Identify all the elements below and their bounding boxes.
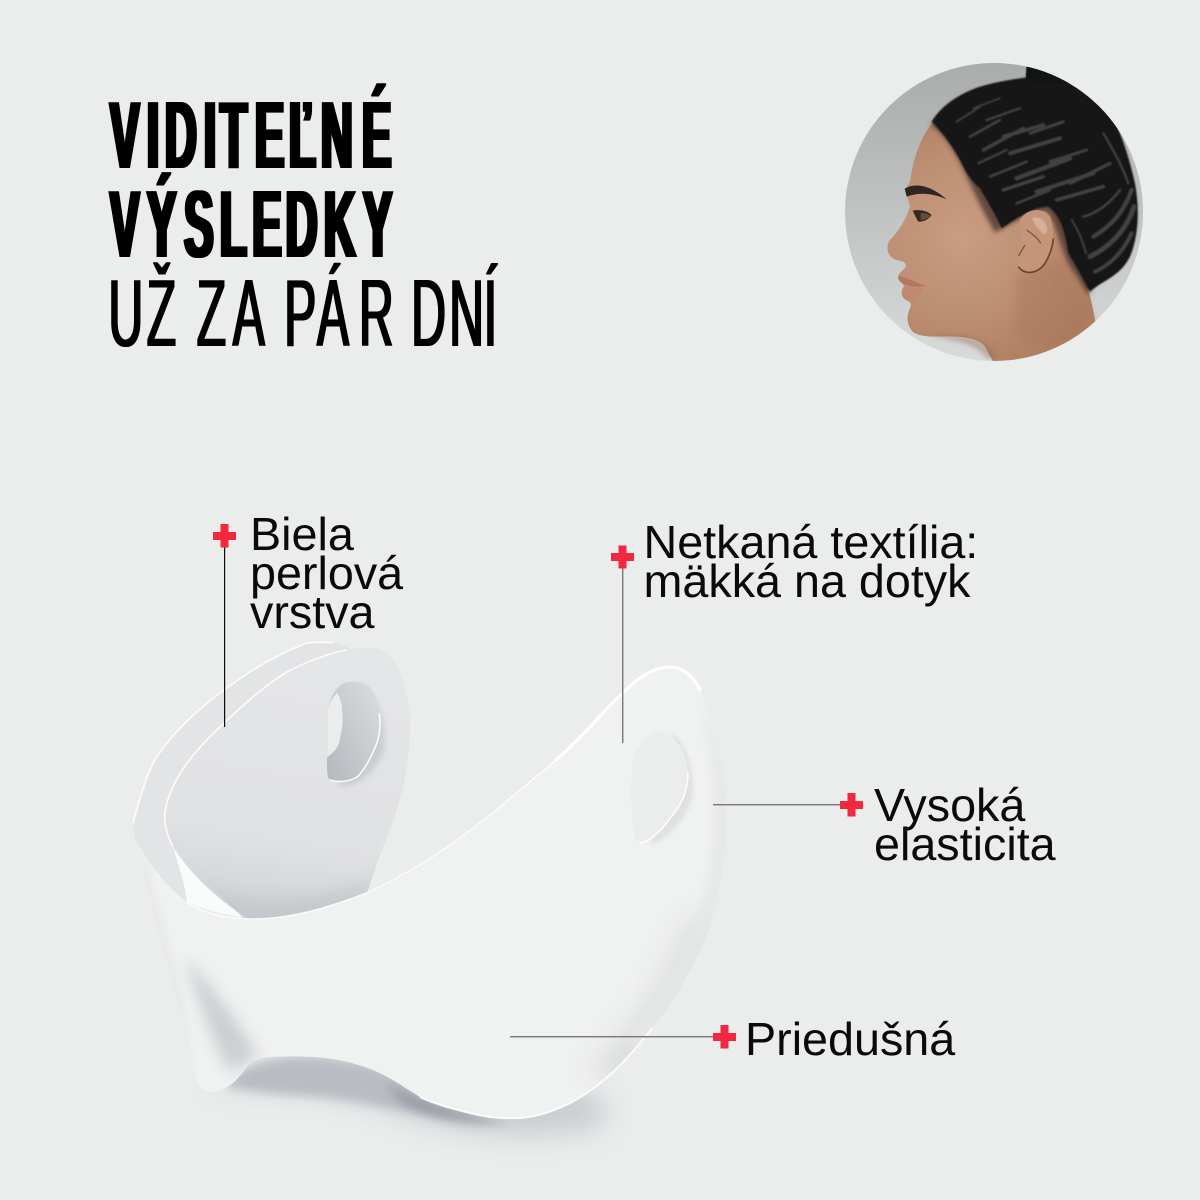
title: VIDITEĽNÉ [110,81,391,189]
ear [1017,210,1053,272]
icon: plus [213,524,236,548]
label: perlová [250,547,403,599]
callout: biela perlova vrstva [213,508,403,727]
icon: plus [611,546,634,568]
portrait: woman in profile [840,60,1150,365]
hole highlight [330,713,380,781]
inner panel rim [165,650,347,847]
inner panel with hole [165,648,410,930]
leader line [713,804,841,805]
callout: priedusna [510,1013,955,1065]
hole opening [327,693,343,757]
eye [913,210,932,222]
leader line [622,567,623,743]
top edge rim [187,760,556,919]
inner panel bottom shade [221,884,368,918]
title [108,81,497,368]
front panel [130,667,731,1118]
back lobe rim [133,642,333,823]
label: vrstva [250,586,375,638]
ground shadow [205,1050,607,1135]
hole shade [338,683,385,786]
hair strands [957,98,1134,272]
eyebrow [905,185,947,199]
jaw shadow [930,335,997,358]
callout: vysoka elasticita [713,779,1056,870]
hair top corner [1026,66,1070,84]
label: mäkká na dotyk [644,555,971,607]
title: VÝSLEDKY [110,170,392,278]
front hole highlight [640,772,688,843]
white pocket sliver [173,847,250,918]
front shading [186,770,726,1120]
mask illustration [130,508,1056,1135]
upper rim highlight [556,667,700,760]
icon: plus [840,793,863,816]
label: elasticita [874,818,1056,870]
hole [327,682,380,782]
neck shade [1019,264,1096,346]
label: Biela [250,508,354,560]
hair [932,66,1138,292]
front hole shade [650,733,693,846]
label: Vysoká [874,779,1025,831]
label: Netkaná textília: [644,516,978,568]
lower rim highlight [420,1028,652,1118]
lips [898,277,926,287]
title: UŽ ZA PÁR DNÍ [108,260,497,368]
hair soft edge [928,120,1096,296]
leader line [510,1036,714,1037]
label: Priedušná [745,1013,955,1065]
front hole [631,732,688,843]
back lobe [133,642,350,904]
callout: netkana textilia [611,516,978,743]
leader line [224,546,225,727]
skin of face and neck [887,117,1100,365]
icon: plus [713,1025,736,1048]
